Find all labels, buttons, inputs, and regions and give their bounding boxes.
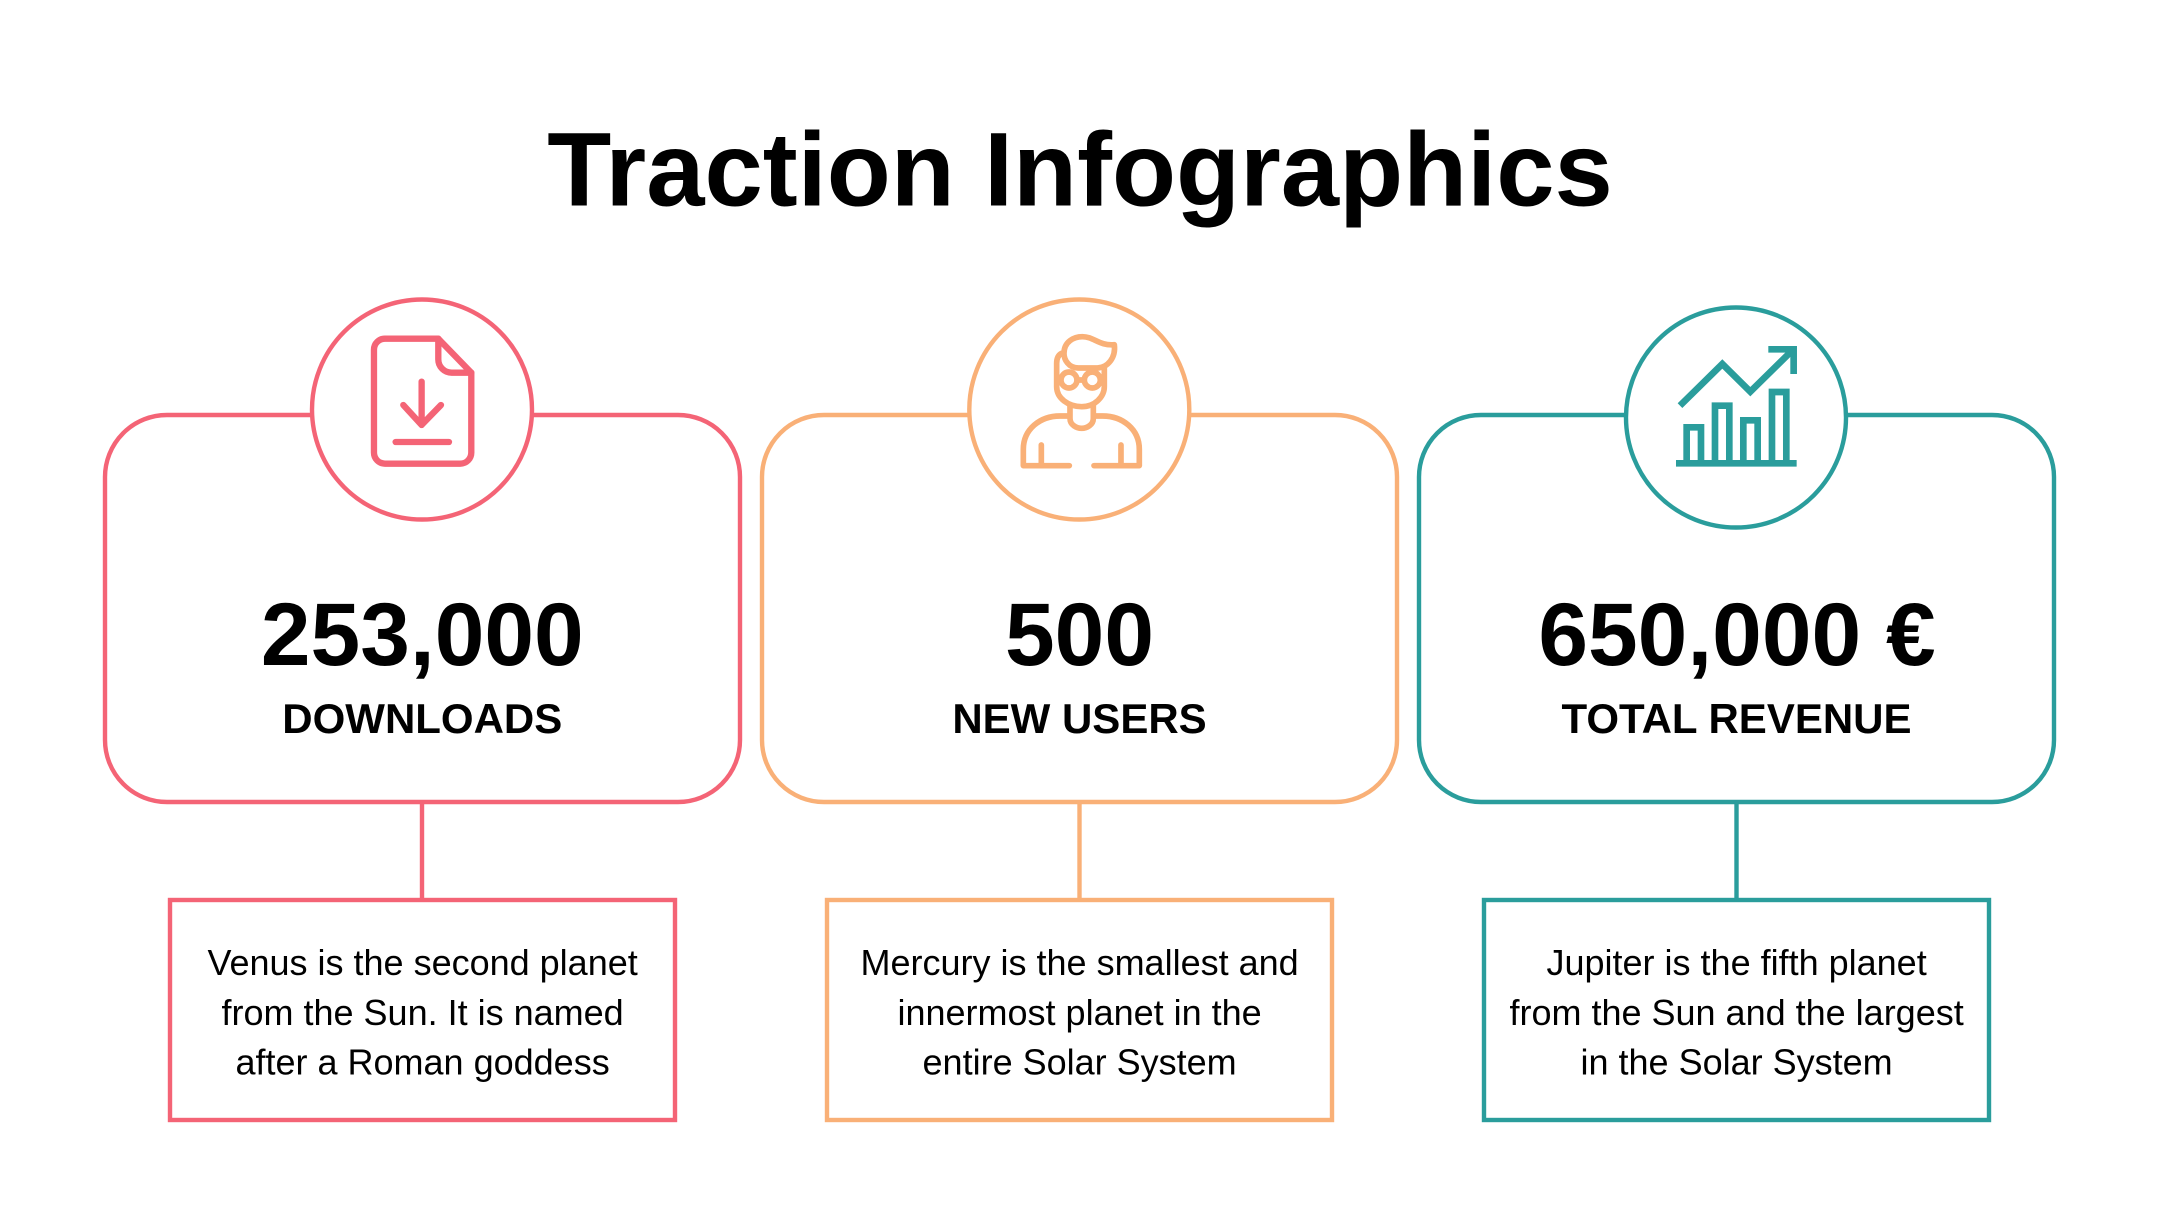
- main card: downloads: [105, 415, 740, 802]
- description box: new users: entire Solar System: [923, 1042, 1237, 1082]
- connector: downloads: [420, 802, 424, 900]
- description box: downloads: Venus is the second planet: [207, 942, 638, 983]
- title: Traction Infographics: [547, 112, 1613, 228]
- value: new users: 500: [1005, 584, 1154, 684]
- description box: downloads: from the Sun. It is named: [222, 992, 624, 1033]
- description box: downloads: after a Roman goddess: [235, 1042, 610, 1082]
- icon circle: new users: [969, 300, 1189, 520]
- panel: total revenue: [1419, 308, 2054, 1120]
- icon: rising bar chart: [1676, 349, 1797, 463]
- main card: total revenue: [1419, 415, 2054, 802]
- description box: total revenue: Jupiter is the fifth planet: [1546, 942, 1927, 983]
- panel: new users: [762, 300, 1397, 1120]
- description box: total revenue: [1484, 900, 1989, 1120]
- panel: downloads: [105, 300, 740, 1120]
- description box: downloads: [170, 900, 675, 1120]
- icon: document download: [374, 339, 471, 464]
- icon: person with glasses: [1023, 337, 1139, 466]
- value: downloads: 253,000: [261, 584, 584, 684]
- label: downloads: DOWNLOADS: [282, 695, 562, 742]
- value: total revenue: 650,000 €: [1538, 584, 1936, 684]
- main card: new users: [762, 415, 1397, 802]
- description box: total revenue: in the Solar System: [1581, 1042, 1893, 1082]
- description box: total revenue: from the Sun and the largest: [1509, 992, 1964, 1033]
- description box: new users: [827, 900, 1332, 1120]
- description box: new users: Mercury is the smallest and: [861, 942, 1299, 983]
- connector: total revenue: [1734, 802, 1739, 900]
- icon circle: total revenue: [1626, 308, 1846, 528]
- icon circle: downloads: [312, 300, 532, 520]
- connector: new users: [1077, 802, 1082, 900]
- label: new users: NEW USERS: [952, 695, 1207, 742]
- label: total revenue: TOTAL REVENUE: [1561, 695, 1912, 742]
- description box: new users: innermost planet in the: [897, 992, 1262, 1033]
